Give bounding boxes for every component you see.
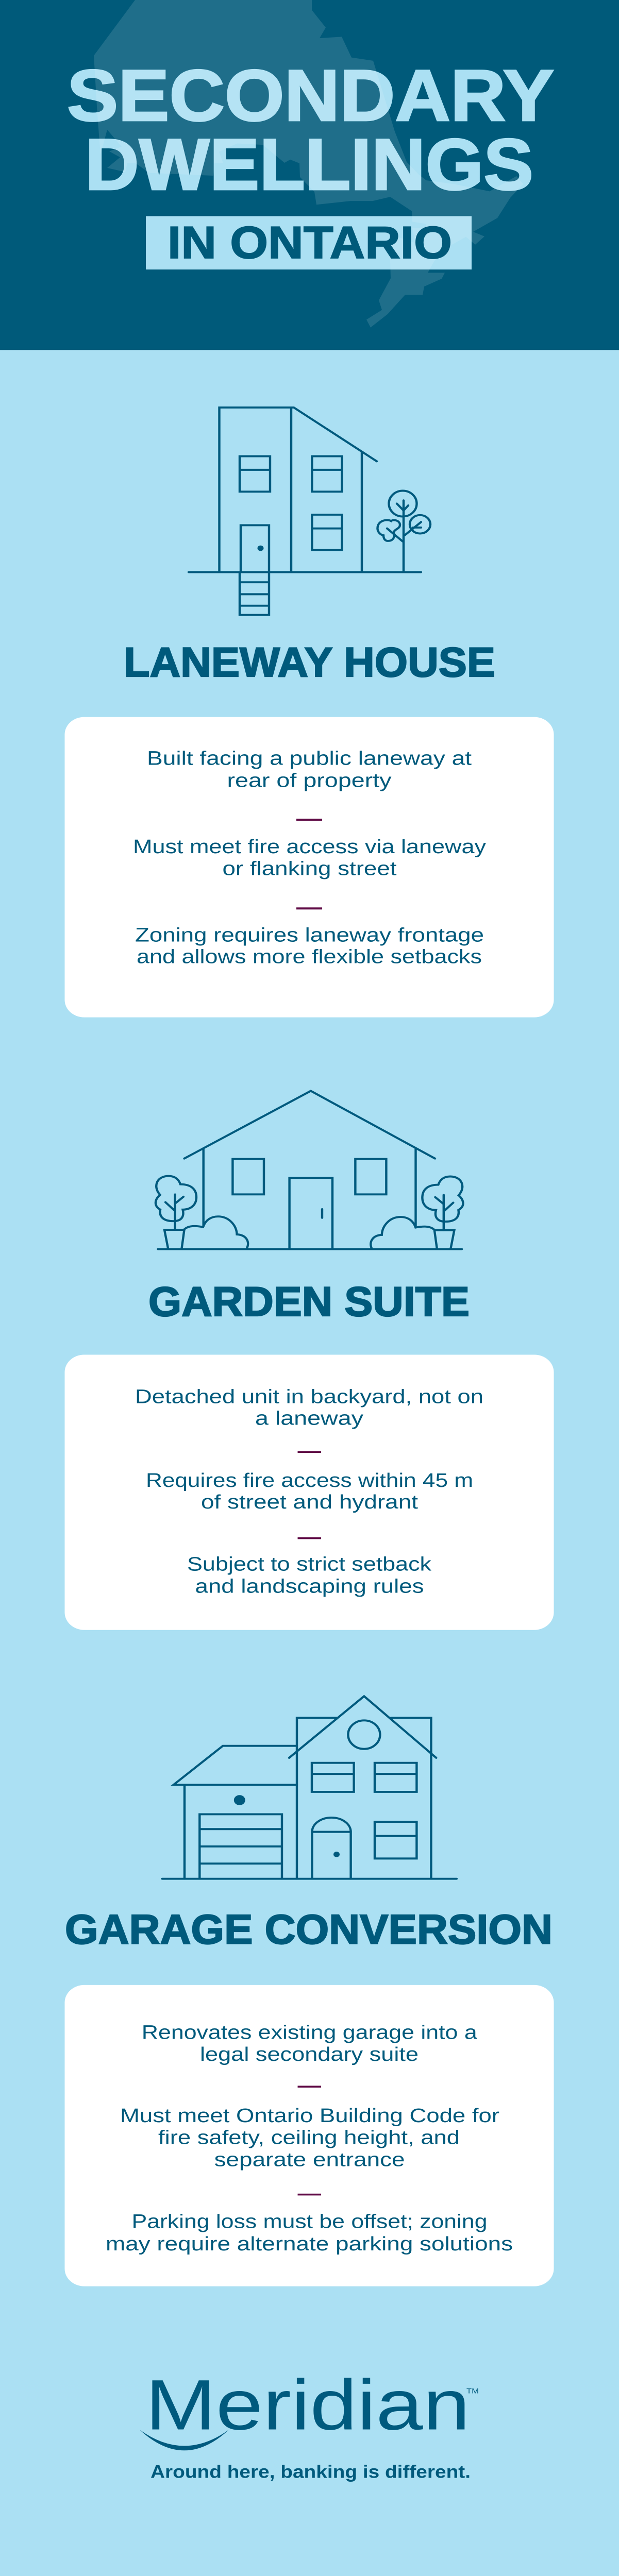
text: detached unit: Detached unit in backyard, not on xyxy=(135,1385,483,1408)
text: setback rules: and landscaping rules xyxy=(195,1575,424,1597)
text: building code xyxy=(120,2104,499,2171)
text: setback rules xyxy=(187,1553,432,1597)
text: renovates garage xyxy=(142,2021,477,2065)
subtitle: IN ONTARIO xyxy=(168,217,452,268)
text: fire access within 45 m xyxy=(146,1469,473,1513)
icon: logo smile xyxy=(140,2430,229,2450)
panel: laneway house card xyxy=(65,717,554,1018)
heading: garage conversion: GARAGE CONVERSION xyxy=(65,1907,553,1953)
text: parking: Parking loss must be offset; zoning xyxy=(132,2210,487,2232)
text: fire access: or flanking street xyxy=(223,857,397,879)
text: building code: fire safety, ceiling height, and xyxy=(158,2126,460,2148)
logo: Meridian: Meridian xyxy=(145,2365,470,2445)
text: renovates garage: Renovates existing garage into a xyxy=(142,2021,477,2043)
text: detached unit xyxy=(135,1385,483,1429)
icon: garden suite house xyxy=(156,1091,463,1249)
text: parking xyxy=(106,2210,513,2255)
text: renovates garage: legal secondary suite xyxy=(200,2043,419,2065)
icon: laneway house xyxy=(189,408,430,615)
text: zoning: and allows more flexible setbacks xyxy=(137,945,482,968)
text: facing laneway: rear of property xyxy=(227,769,392,791)
trademark: TM xyxy=(466,2387,479,2395)
panel: garage conversion card xyxy=(65,1985,554,2286)
heading: garden suite: GARDEN SUITE xyxy=(148,1279,470,1325)
title: DWELLINGS xyxy=(85,124,533,205)
text: building code: separate entrance xyxy=(214,2148,405,2171)
panel: header banner xyxy=(0,0,619,350)
map of Ontario xyxy=(94,0,523,328)
text: setback rules: Subject to strict setback xyxy=(187,1553,432,1575)
text: fire access within 45 m: Requires fire access within 45 m xyxy=(146,1469,473,1492)
subtitle box xyxy=(146,216,472,269)
text: zoning: Zoning requires laneway frontage xyxy=(135,924,484,946)
heading: laneway house: LANEWAY HOUSE xyxy=(124,640,495,686)
tagline: Around here, banking is different. xyxy=(150,2462,471,2482)
text: fire access: Must meet fire access via laneway xyxy=(133,835,487,857)
title xyxy=(67,55,554,205)
text: building code: Must meet Ontario Building Code for xyxy=(120,2104,499,2126)
icon: left potted tree and bush xyxy=(156,1176,248,1248)
text: facing laneway xyxy=(147,747,472,791)
icon: garage conversion house xyxy=(162,1696,457,1879)
text: fire access within 45 m: of street and hydrant xyxy=(201,1490,419,1513)
text: facing laneway: Built facing a public laneway at xyxy=(147,747,472,769)
title: SECONDARY xyxy=(67,55,554,136)
text: detached unit: a laneway xyxy=(255,1407,364,1429)
icon: right potted tree and bush xyxy=(371,1177,463,1249)
panel: garden suite card xyxy=(65,1354,554,1630)
text: fire access xyxy=(133,835,487,879)
text: parking: may require alternate parking solutions xyxy=(106,2232,513,2255)
text: zoning xyxy=(135,924,484,968)
